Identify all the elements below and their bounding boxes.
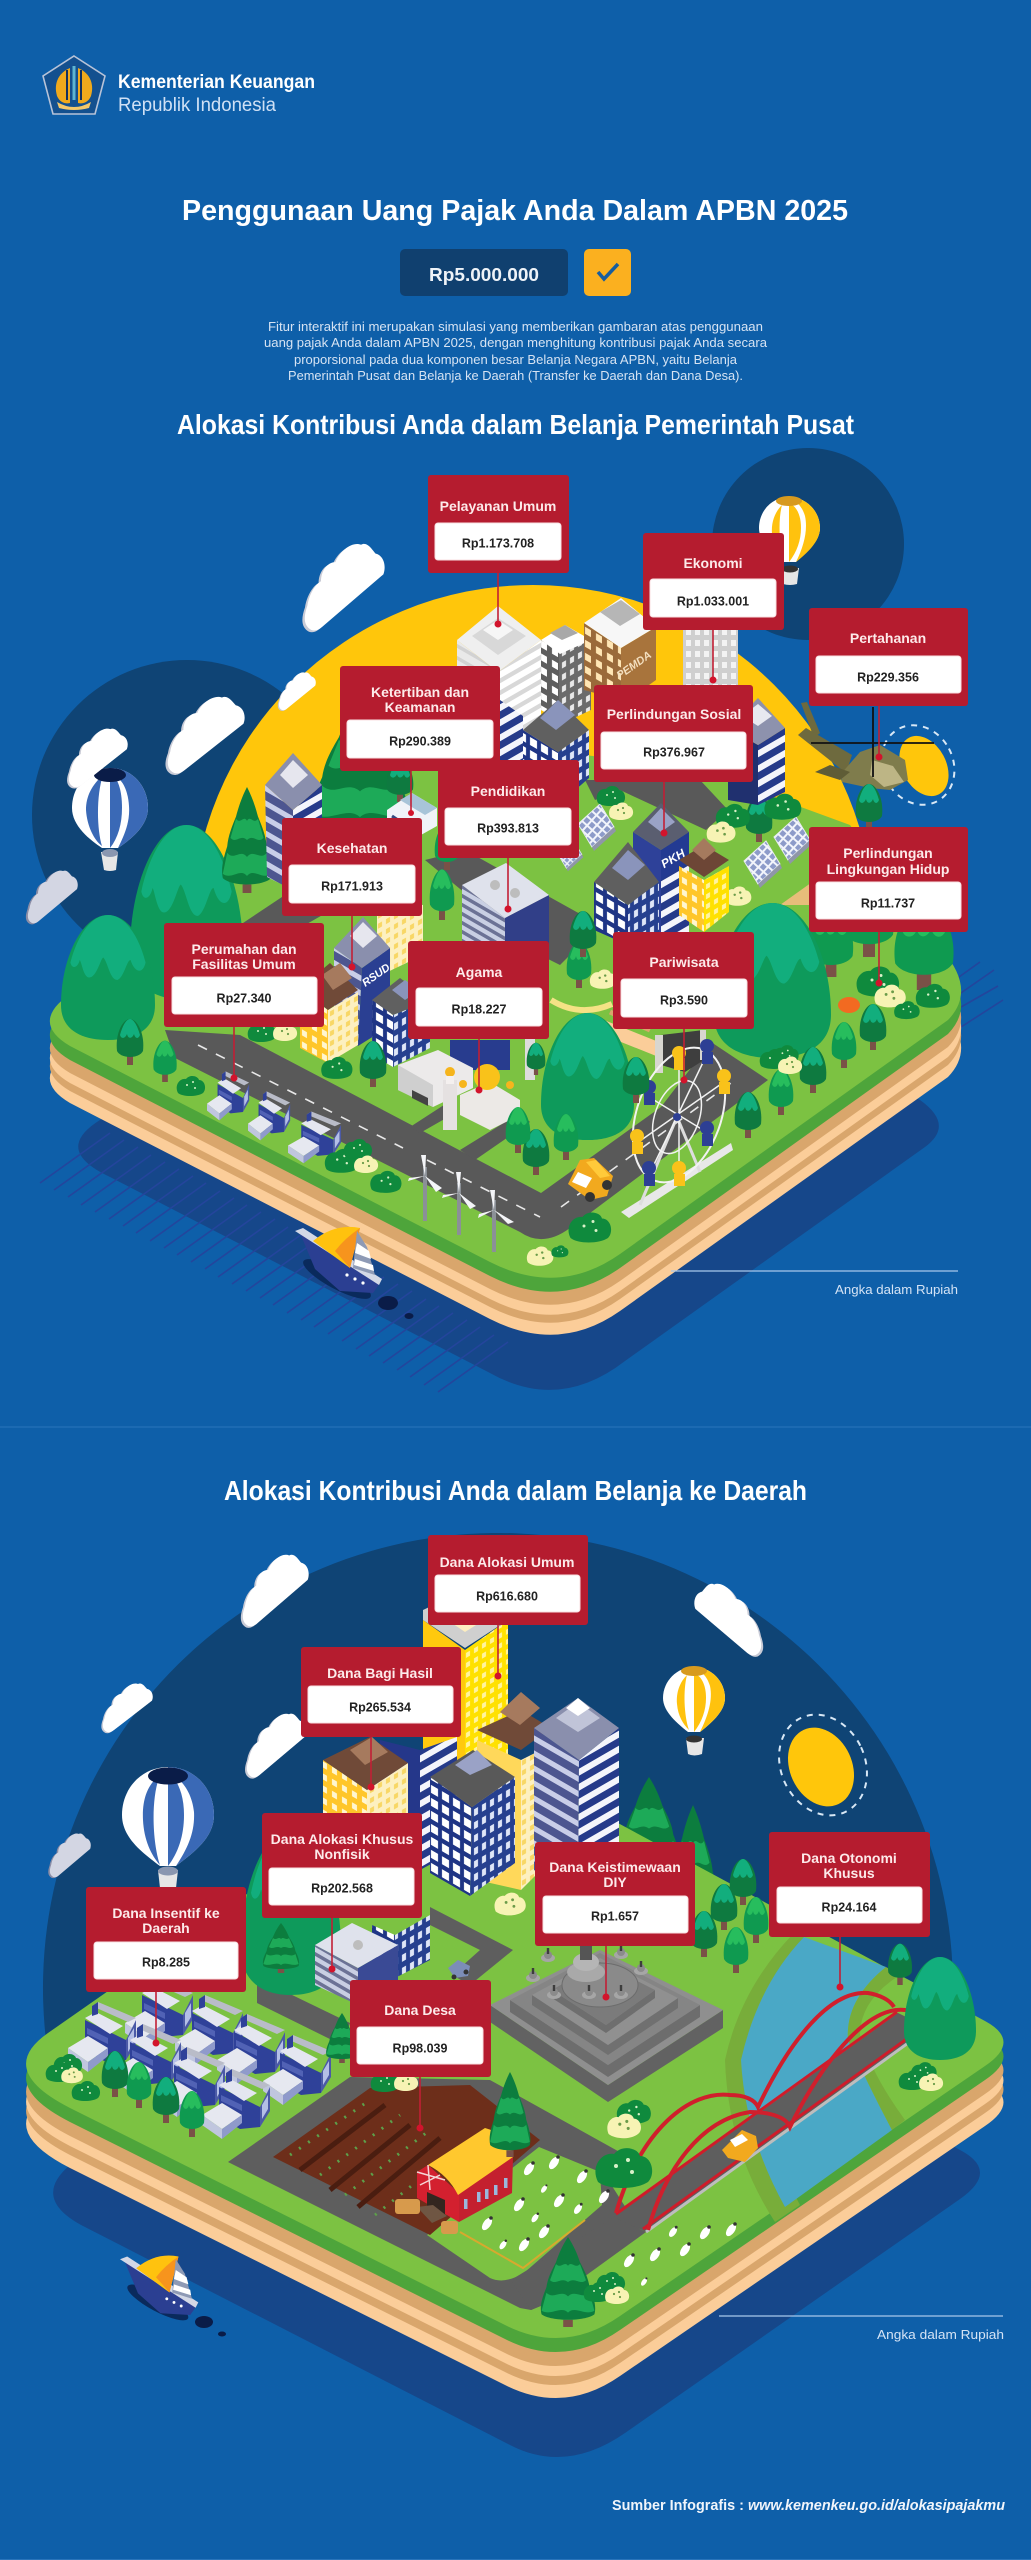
input amount box: Rp5.000.000 <box>429 265 539 285</box>
label: Kesehatan: Rp171.913 <box>321 880 383 894</box>
label: Ketertiban dan Keamanan <box>340 666 500 816</box>
hatching lines under island <box>40 962 1003 1392</box>
island side layers and top <box>26 1741 1004 2398</box>
label: Dana Otonomi Khusus: Rp24.164 <box>822 1900 876 1914</box>
label: Pertahanan: Rp229.356 <box>857 670 919 684</box>
trees <box>102 1859 912 2327</box>
label: Dana Keistimewaan DIY: Rp1.657 <box>591 1910 639 1924</box>
bushes <box>46 1893 943 2304</box>
plaza ring and sand <box>551 880 815 1050</box>
label: Perumahan dan Fasilitas Umum: Rp27.340 <box>217 992 271 1006</box>
label: Ketertiban dan Keamanan: Keamanan <box>385 699 455 715</box>
boat <box>120 2256 198 2326</box>
front trees <box>117 911 886 1175</box>
intro paragraph <box>264 320 767 383</box>
buildings under Agama <box>450 1040 510 1070</box>
pines and back trees <box>222 697 954 990</box>
building: yellow and cream block <box>300 963 358 1063</box>
label: Dana Bagi Hasil: Dana Bagi Hasil <box>327 1665 433 1681</box>
source line: Sumber Infografis : www.kemenkeu.go.id/alokasipajakmu <box>612 2498 1005 2514</box>
building: navy tower behind <box>380 1737 457 1870</box>
sheep <box>480 2155 738 2287</box>
back bushes <box>597 786 801 906</box>
farm field <box>273 2085 540 2235</box>
sky circle left <box>32 660 342 970</box>
label: Ekonomi <box>643 533 784 684</box>
intro paragraph: Fitur interaktif ini merupakan simulasi yang memberikan gambaran atas penggunaan <box>268 320 763 334</box>
building: small navy <box>372 1915 430 1978</box>
label: Pariwisata: Pariwisata <box>649 954 719 970</box>
label: Perlindungan Lingkungan Hidup: Rp11.737 <box>861 896 915 910</box>
sun with dashed ring <box>868 712 968 818</box>
island shadow <box>53 1900 980 2457</box>
label: Perumahan dan Fasilitas Umum: Fasilitas Umum <box>192 956 296 972</box>
label: Dana Alokasi Khusus Nonfisik: Dana Alokasi Khusus <box>271 1831 414 1847</box>
building: yellow block behind RSUD <box>377 900 423 977</box>
label: Pertahanan <box>809 608 968 760</box>
houses cluster <box>68 1977 331 2139</box>
river with banks <box>725 1935 905 2222</box>
building: school <box>462 863 549 985</box>
row of houses <box>207 1071 341 1163</box>
label: Dana Alokasi Khusus Nonfisik: Nonfisik <box>314 1846 370 1862</box>
fence <box>460 2220 585 2268</box>
balloon blue <box>72 768 148 871</box>
building: yellow main tower <box>423 1590 508 1850</box>
label: Pelayanan Umum <box>428 475 569 628</box>
icon: confirm check button <box>584 249 631 296</box>
clouds <box>26 544 385 924</box>
label: Perumahan dan Fasilitas Umum: Perumahan dan <box>191 941 297 957</box>
pine trees behind island <box>618 1777 718 1925</box>
ambulance <box>387 793 437 840</box>
illustration: regional island <box>26 1533 1004 2457</box>
note: figures in rupiah, regional: Angka dalam Rupiah <box>877 2327 1004 2342</box>
building: navy far-right tower <box>728 698 785 805</box>
illustration: central government island <box>26 448 1003 1392</box>
heading: central government: Alokasi Kontribusi Anda dalam Belanja Pemerintah Pusat <box>177 409 854 440</box>
building: PKH tower: PKH <box>659 846 688 871</box>
building: white block under Ekonomi <box>683 620 738 690</box>
sheep meadow block <box>427 2147 602 2280</box>
label: Ketertiban dan Keamanan: Ketertiban dan <box>371 684 469 700</box>
balloon yellow <box>663 1666 725 1756</box>
temple <box>490 1945 723 2102</box>
ferris wheel <box>616 1035 742 1218</box>
island shadow <box>78 900 939 1390</box>
label: Dana Insentif ke Daerah: Daerah <box>142 1920 190 1936</box>
label: Agama <box>408 941 549 1094</box>
building: yellow block <box>679 838 729 932</box>
label: Dana Bagi Hasil: Rp265.534 <box>349 1700 411 1714</box>
label: Ekonomi: Ekonomi <box>683 555 743 571</box>
navy dome backdrop <box>43 1533 953 2100</box>
building: RSUD tower: RSUD <box>360 962 393 989</box>
label: Perlindungan Lingkungan Hidup <box>809 827 968 986</box>
building: navy front block 2 <box>372 978 430 1067</box>
dark gate behind ferris wheel <box>655 1030 706 1073</box>
label: Perlindungan Sosial <box>594 685 753 836</box>
label: Dana Keistimewaan DIY: Dana Keistimewaan <box>549 1859 681 1875</box>
building: navy centre block <box>523 700 589 805</box>
label: Perlindungan Lingkungan Hidup: Perlindungan <box>843 845 933 861</box>
river-side mountain <box>904 1957 976 2060</box>
building: navy block centre <box>430 1750 515 1896</box>
front mountains <box>61 903 831 1140</box>
title: Penggunaan Uang Pajak Anda Dalam APBN 2025 <box>182 195 848 227</box>
mosque <box>443 1030 535 1130</box>
icon: ministry crest <box>43 56 105 114</box>
building: far-left tower <box>265 753 322 890</box>
roads <box>228 1907 640 2310</box>
input amount box <box>400 249 568 296</box>
label: Dana Alokasi Umum <box>428 1535 588 1680</box>
label: Pariwisata <box>613 932 754 1084</box>
building: grey-blue striped tower <box>534 1698 619 1900</box>
bridge <box>614 1993 929 2232</box>
building: Pelayanan Umum tower <box>457 606 541 790</box>
label: Ekonomi: Rp1.033.001 <box>677 594 749 608</box>
back mountains <box>130 825 243 1000</box>
label: Dana Desa <box>350 1980 491 2132</box>
island side layers and top <box>50 740 961 1335</box>
ministry name <box>118 72 315 116</box>
front bushes <box>177 967 950 1266</box>
label: Dana Desa: Rp98.039 <box>393 2042 447 2056</box>
ministry name: Kementerian Keuangan <box>118 72 315 93</box>
building: PEMDA <box>584 598 656 705</box>
label: Dana Alokasi Umum: Rp616.680 <box>476 1590 538 1604</box>
building: white grey-window block <box>541 625 591 725</box>
label: Pariwisata: Rp3.590 <box>660 994 708 1008</box>
helicopter <box>798 702 934 790</box>
heading: regional transfers: Alokasi Kontribusi Anda dalam Belanja ke Daerah <box>224 1475 807 1506</box>
label: Dana Insentif ke Daerah: Dana Insentif ke <box>112 1905 220 1921</box>
label: Pelayanan Umum: Rp1.173.708 <box>462 536 534 550</box>
yellow car <box>568 1158 613 1202</box>
road to bridge <box>511 2217 646 2310</box>
label: Agama: Rp18.227 <box>452 1002 506 1016</box>
teal hill <box>241 1830 341 1995</box>
label: Dana Alokasi Khusus Nonfisik: Rp202.568 <box>311 1882 373 1896</box>
label: Pendidikan: Pendidikan <box>471 783 545 799</box>
label: Dana Alokasi Khusus Nonfisik <box>262 1813 422 1972</box>
label: Dana Otonomi Khusus <box>769 1832 930 1990</box>
label: Dana Otonomi Khusus: Khusus <box>823 1865 875 1881</box>
big yellow sun backdrop <box>192 585 874 1267</box>
building: PKH tower <box>633 803 689 960</box>
sky circle right <box>712 448 904 640</box>
intro paragraph: uang pajak Anda dalam APBN 2025, dengan menghitung kontribusi pajak Anda secara <box>264 336 767 350</box>
label: Pertahanan: Pertahanan <box>850 630 926 646</box>
small blue car <box>448 1960 470 1980</box>
boat <box>295 1227 382 1306</box>
building: office <box>315 1923 398 2005</box>
building: RSUD tower <box>334 917 393 1046</box>
label: Pendidikan <box>438 760 579 912</box>
label: Pelayanan Umum: Pelayanan Umum <box>440 498 556 514</box>
label: Dana Keistimewaan DIY: DIY <box>603 1874 627 1890</box>
label: Kesehatan <box>282 818 422 970</box>
roads <box>165 780 768 1239</box>
label: Perumahan dan Fasilitas Umum <box>164 923 324 1082</box>
sun with dashed ring <box>763 1700 883 1830</box>
header: logo and ministry name <box>43 56 315 116</box>
label: Dana Keistimewaan DIY <box>535 1842 695 2000</box>
building: PEMDA: PEMDA <box>615 649 654 682</box>
label: Dana Insentif ke Daerah <box>86 1887 246 2046</box>
solar panels <box>557 804 812 951</box>
building: cream brown-roof left <box>323 1737 408 1830</box>
balloon blue <box>122 1767 214 1889</box>
intro paragraph: proporsional pada dua komponen besar Belanja Negara APBN, yaitu Belanja <box>294 353 737 367</box>
barn <box>395 2128 513 2234</box>
label: Ketertiban dan Keamanan: Rp290.389 <box>389 734 451 748</box>
label: Dana Alokasi Umum: Dana Alokasi Umum <box>440 1554 574 1570</box>
white building beside mosque <box>398 1050 473 1107</box>
balloon yellow <box>759 496 820 585</box>
building: cream tower <box>477 1692 551 1890</box>
label: Perlindungan Lingkungan Hidup: Lingkungan Hidup <box>827 861 949 877</box>
boat bubbles <box>378 1296 414 1319</box>
label: Dana Desa: Dana Desa <box>384 2002 456 2018</box>
label: Dana Bagi Hasil <box>301 1647 461 1790</box>
building: navy centre block left stripes <box>500 700 523 790</box>
label: Dana Insentif ke Daerah: Rp8.285 <box>142 1956 190 1970</box>
label: Pendidikan: Rp393.813 <box>477 822 539 836</box>
ministry name: Republik Indonesia <box>118 95 276 116</box>
label: Perlindungan Sosial: Perlindungan Sosial <box>607 706 741 722</box>
label: Perlindungan Sosial: Rp376.967 <box>643 746 705 760</box>
label: Dana Otonomi Khusus: Dana Otonomi <box>801 1850 897 1866</box>
note: figures in rupiah, central: Angka dalam Rupiah <box>835 1282 958 1297</box>
building: navy front block <box>594 842 659 955</box>
label: Kesehatan: Kesehatan <box>317 840 387 856</box>
wind turbines <box>408 1155 514 1252</box>
intro paragraph: Pemerintah Pusat dan Belanja ke Daerah (Transfer ke Daerah dan Dana Desa). <box>288 369 743 383</box>
clouds <box>48 1555 763 1878</box>
boat bubbles <box>195 2316 226 2336</box>
label: Agama: Agama <box>456 964 503 980</box>
